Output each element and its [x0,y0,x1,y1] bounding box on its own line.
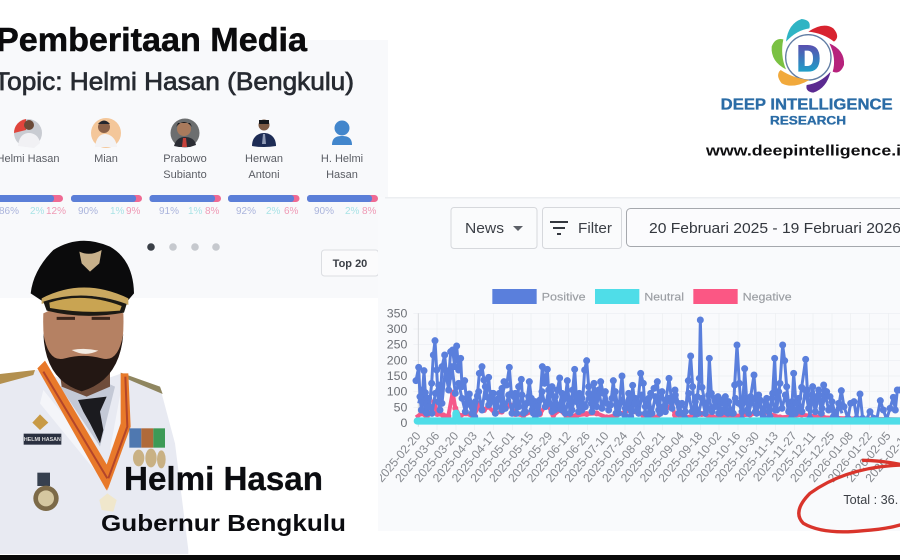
sentiment percentages: 8% [205,206,220,217]
uniform [0,370,188,554]
sentiment percentages: 92% [236,206,256,217]
x axis labels: 2026-02-05 [843,429,894,485]
sentiment percentages [0,206,377,217]
x axis labels: 2025-04-03 [430,429,480,485]
red hand-drawn circle [799,460,900,532]
dropdown: News: News [465,220,504,237]
names: Mian [94,153,118,165]
y axis labels: 0 [400,416,407,430]
carousel dots [147,243,220,251]
names: Hasan [326,169,358,181]
sentiment percentages: 2% [345,206,360,217]
avatar: Prabowo Subianto [170,118,200,148]
x axis labels: 2025-07-10 [561,429,612,485]
sentiment percentages: 2% [30,206,45,217]
date range: 20 Februari 2025 - 19 Februari 2026 [649,220,900,237]
series: neutral [417,413,900,421]
x axis labels: 2025-05-29 [505,429,556,485]
x axis labels: 2025-02-20 [373,429,424,485]
beard [43,333,123,391]
avatar: H. Helmi Hasan [332,120,352,145]
button: Top 20 [322,250,378,276]
chest medal [33,473,59,511]
sentiment percentages: 90% [314,206,334,217]
name tag: HELMI HASAN [24,437,61,443]
sash pendant [99,493,117,512]
x axis labels: 2025-10-16 [693,429,744,485]
cap band [42,287,128,305]
x axis labels: 2025-12-25 [787,429,838,485]
y axis labels: 50 [394,400,407,414]
y axis labels [387,306,407,430]
avatar: Mian [91,118,121,148]
line chart: daily sentiment [373,289,900,532]
x axis labels: 2025-09-04 [637,429,687,485]
epaulette right [121,373,163,394]
sentiment percentages: 1% [110,206,125,217]
controls [451,208,900,248]
x axis labels: 2025-11-13 [731,429,781,484]
avatar: Helmi Hasan [14,119,42,148]
x axis labels: 2025-03-20 [411,429,462,485]
series: negative [416,393,900,419]
title: Pemberitaan Media [0,21,308,58]
sentiment percentages: 91% [159,206,179,217]
sash [37,361,131,491]
dropdown: News [451,208,537,248]
series: positive [416,320,900,421]
logo mark [772,19,844,93]
x axis labels: 2026-01-22 [825,429,875,485]
name heading: Helmi Hasan [124,460,323,497]
x axis labels: 2025-10-02 [674,429,725,485]
subtitle: topic: Topic: Helmi Hasan (Bengkulu) [0,68,354,96]
total count: Total : 36. [843,493,898,507]
x axis labels: 2025-05-01 [467,429,518,485]
bottom black bar [0,555,900,560]
x axis labels: 2025-06-12 [524,429,574,485]
tie [78,397,107,443]
cap [31,241,134,301]
job title: Gubernur Bengkulu [101,510,346,536]
names: Antoni [248,169,280,181]
y axis labels: 300 [387,322,407,336]
sentiment percentages: 2% [266,206,281,217]
y axis labels: 200 [387,353,407,367]
sentiment percentages: 12% [46,206,66,217]
names [0,153,363,181]
date range [626,208,900,246]
sentiment percentages: 1% [188,206,203,217]
button: Top 20: Top 20 [333,258,367,270]
sentiment percentages: 9% [126,206,141,217]
portrait: Helmi Hasan [0,241,188,554]
x axis labels: 2025-07-24 [580,429,631,485]
panel: media coverage ranking [0,21,388,298]
x axis labels: 2025-04-17 [449,429,499,485]
sentiment percentages: 8% [362,206,377,217]
series: positive, dense low values [419,367,842,415]
x axis labels: 2025-06-26 [543,429,593,485]
x axis labels: 2025-10-30 [712,429,762,485]
names: Prabowo [163,153,207,165]
epaulette left [0,370,35,384]
logo: Deep Intelligence Research [705,19,900,160]
names: Subianto [163,169,207,181]
sentiment percentages: 90% [78,206,98,217]
y axis labels: 150 [387,369,407,383]
legend [492,289,792,304]
x axis labels: 2025-08-21 [618,429,668,485]
face [43,303,123,378]
eyes and brow [57,314,110,323]
legend: Positive [542,291,586,303]
names: H. Helmi [321,153,363,165]
website url: www.deepintelligence.id [705,144,900,160]
x axis labels: 2025-05-15 [486,429,537,485]
x axis labels [373,429,900,485]
y axis labels: 250 [387,338,407,352]
logo wordmark: DEEP INTELLIGENCE [721,97,893,114]
legend: Neutral [644,291,684,303]
button: Filter [542,208,622,248]
avatar: Herwan Antoni [252,120,276,147]
panel: sentiment chart background [378,197,900,531]
neck [58,363,110,397]
medals [133,449,166,468]
x axis labels: 2025-11-27 [750,429,800,484]
names: Herwan [245,153,283,165]
x axis labels: 2025-03-06 [392,429,443,485]
lapels [40,387,130,477]
x axis labels: 2025-09-18 [655,429,706,485]
sentiment bars [0,195,378,202]
gold star [32,414,48,430]
name tag [24,434,61,445]
button: Filter: Filter [578,220,612,237]
visor [43,296,127,316]
x axis labels: 2025-08-07 [599,429,650,485]
cap badge [79,250,102,272]
legend: Negative [743,291,792,303]
y axis labels: 350 [387,306,407,320]
ribbons [129,428,165,448]
smile [72,349,98,354]
panel: white portrait background [0,298,377,556]
sentiment percentages: 6% [284,206,299,217]
logo tagline: RESEARCH [770,113,846,127]
y axis labels: 100 [387,385,407,399]
x axis labels: 2025-12-11 [769,429,819,484]
x axis labels: 2026-01-08 [806,429,856,485]
